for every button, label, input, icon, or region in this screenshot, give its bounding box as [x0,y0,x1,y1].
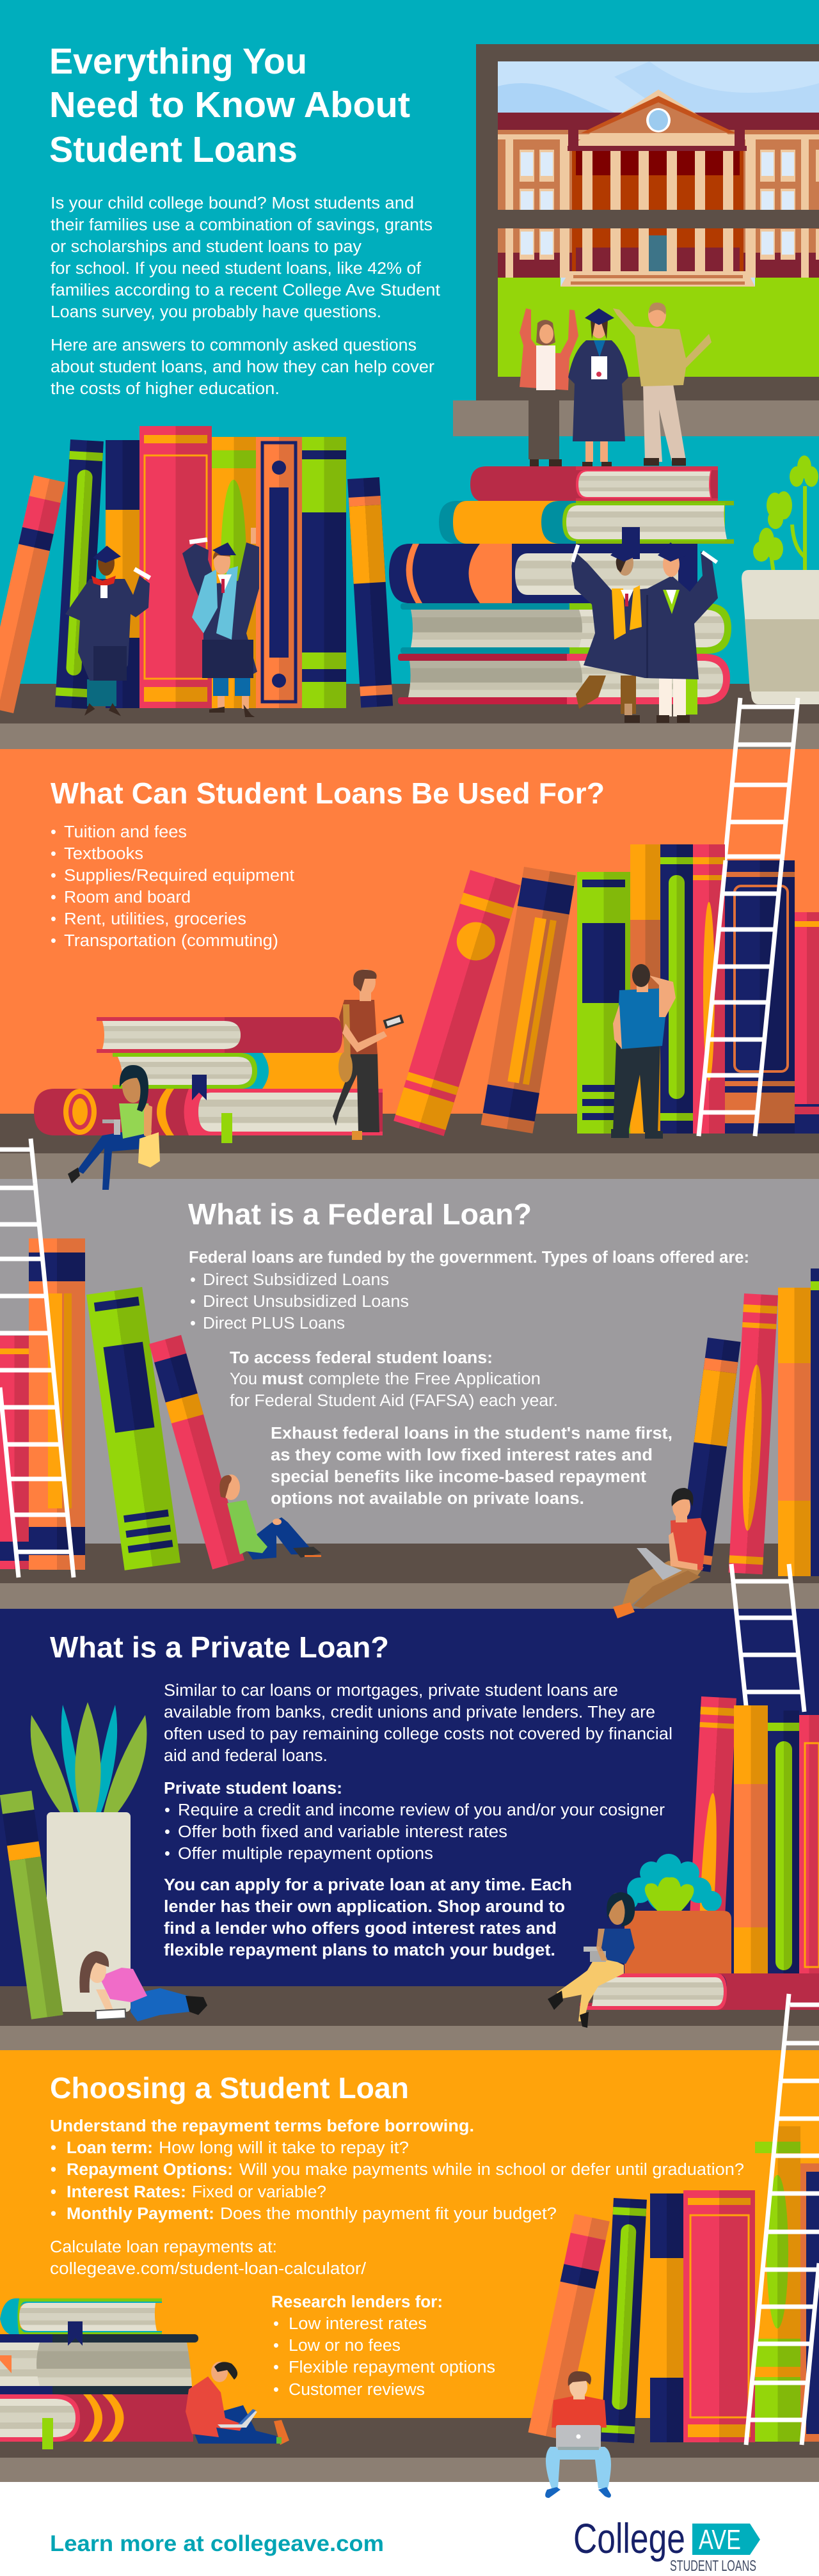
apply note: flexible repayment plans to match your budget. [164,1941,555,1959]
leaning orange book [528,2214,610,2440]
leaning pink book with ellipse [729,1293,778,1574]
research lenders [271,2293,495,2399]
figure: man in blue shirt scratching head [611,964,676,1139]
leaning pink book [686,1696,736,1986]
orange pot [624,1911,731,1973]
list of uses: • [51,867,56,885]
loan types: Federal loans are funded by the government. Types of loans offered are: [189,1249,749,1267]
illustration: right books in federal section [678,1268,819,1576]
loan types: Direct Unsubsidized Loans [203,1293,409,1311]
exhaust federal loans note: as they come with low fixed interest rates and [271,1446,653,1464]
research lenders: • [273,2381,279,2399]
illustration: leaning green book [0,1790,63,2019]
calculator link: Calculate loan repayments at: [50,2238,277,2256]
leaning navy book [678,1338,741,1572]
figure: family with graduate on book stack [520,303,712,468]
leaning navy book right [347,477,393,707]
description: aid and federal loans. [164,1747,328,1765]
intro paragraph 1: families according to a recent College Ave Student [51,281,440,299]
intro paragraph 1: their families use a combination of savings, grants [51,216,433,234]
calculator link [50,2238,367,2278]
illustration: ladder left overlay [0,1183,74,1577]
repayment terms: • [51,2139,56,2157]
private loan features: Offer both fixed and variable interest rates [178,1823,507,1841]
illustration: ladder between federal and private sections [731,1564,804,1712]
description: Similar to car loans or mortgages, private student loans are [164,1682,618,1700]
portico [572,150,743,278]
repayment terms: Repayment Options: [67,2161,233,2179]
figure: two graduates hugging [571,542,718,723]
list of uses: • [51,823,56,841]
amber book [439,501,734,544]
FAFSA note [230,1349,558,1410]
intro paragraph 1: or scholarships and student loans to pay [51,238,362,256]
illustration: right books in choosing section [528,2126,819,2443]
description: available from banks, credit unions and private lenders. They are [164,1703,655,1721]
private loan features: • [164,1801,170,1819]
navy framed book [725,860,795,1134]
repayment terms: • [51,2205,56,2223]
leaning pink book [394,870,520,1136]
pink book [683,2190,755,2442]
list of uses: • [51,845,56,863]
bush [623,1854,722,1913]
section: private background [0,1609,819,2050]
list of uses: Rent, utilities, groceries [64,910,246,928]
exhaust federal loans note [271,1425,672,1508]
calculator link: collegeave.com/student-loan-calculator/ [50,2260,367,2278]
mother [520,308,578,467]
logo: College Ave Student Loans: College [573,2515,685,2562]
intro paragraph 2: the costs of higher education. [51,380,280,398]
repayment terms: Does the monthly payment fit your budget? [220,2205,557,2223]
apply note: lender has their own application. Shop around to [164,1898,565,1916]
apply note [164,1876,572,1959]
figure: man with laptop in red shirt [613,1488,706,1618]
logo: College Ave Student Loans: STUDENT LOANS [670,2557,756,2575]
list of uses: Tuition and fees [64,823,187,841]
list of uses: Textbooks [64,845,143,863]
list of uses: Room and board [64,889,191,906]
figure: woman reading on tablet lying down [79,1951,207,2021]
tall pink book [139,426,212,708]
heading: Choosing a Student Loan [50,2071,409,2105]
father [613,303,712,466]
illustration: upright book row [0,426,393,713]
illustration: ladder between private and choosing sections [781,1994,819,2081]
title: Student Loans [49,129,298,170]
illustration: left book stack in choosing section [0,2298,198,2449]
apply note: find a lender who offers good interest rates and [164,1920,557,1938]
figure: graduate with red scarf [65,546,151,714]
repayment terms: Loan term: [67,2139,153,2157]
private loan features: • [164,1823,170,1841]
loan types [189,1249,749,1332]
leaning orange book [0,475,65,713]
FAFSA note: must [262,1370,304,1388]
green book with navy bands [302,437,346,708]
navy book with green pill [55,439,104,709]
illustration: horizontal book stack [389,466,734,715]
text block: uses [51,777,605,950]
figure: man with tablet [333,969,404,1140]
FAFSA note: complete the Free Application [308,1370,541,1388]
loan types: Direct Subsidized Loans [203,1271,389,1289]
intro paragraph 1: Is your child college bound? Most students and [51,194,414,212]
FAFSA note: To access federal student loans: [230,1349,493,1367]
heading: What is a Federal Loan? [188,1197,532,1231]
bookmark [622,527,640,559]
private loan features: Offer multiple repayment options [178,1845,433,1863]
title: Everything You [49,41,307,82]
research lenders: • [273,2315,279,2333]
exhaust federal loans note: Exhaust federal loans in the student's name first, [271,1425,672,1442]
intro paragraph 2: Here are answers to commonly asked questions [51,336,417,354]
text block: private [50,1631,672,1959]
loan types: Direct PLUS Loans [203,1315,345,1332]
graduate [568,308,628,468]
title: Need to Know About [49,84,410,125]
figure: boy with laptop sitting by books [186,2362,289,2445]
figure: man with laptop front view [545,2371,611,2498]
figure: woman seated with laptop [68,1065,160,1190]
lying book [580,1973,819,2010]
orange book with navy frame [256,437,302,708]
loan types: • [190,1271,196,1289]
illustration: ladder between hero and uses sections [699,698,798,1136]
text block: hero [49,41,440,398]
research lenders: • [273,2337,279,2355]
illustration: ladder top above federal section [0,1139,35,1183]
research lenders: Research lenders for: [271,2293,443,2311]
illustration: potted plant [742,455,819,704]
section: federal background [0,1179,819,1609]
section: hero background [0,0,819,749]
repayment terms: Will you make payments while in school or defer until graduation? [239,2161,744,2179]
illustration: campus building seen through window [453,44,819,436]
footer call to action: Learn more at collegeave.com [50,2531,384,2556]
illustration: private plant with tall pot [31,1702,147,2012]
navy book [389,544,697,603]
research lenders: Flexible repayment options [289,2359,495,2376]
private loan features: • [164,1845,170,1863]
FAFSA note: You [230,1370,257,1388]
illustration: right books and bush in private section [580,1696,819,2010]
illustration: ladder over navy book (redraw on top) [699,857,783,1136]
intro paragraph 1 [51,194,440,321]
title [49,41,410,170]
intro paragraph 1: for school. If you need student loans, like 42% of [51,260,422,278]
leaning navy book [601,2198,647,2443]
green book [577,872,630,1134]
navy book with green pill [660,844,693,1134]
heading: What is a Private Loan? [50,1631,389,1664]
pink book [693,844,725,1134]
illustration: book stack in uses section [34,1017,383,1143]
loan types: • [190,1293,196,1311]
loan types: • [190,1315,196,1332]
figure: boy in green hoodie sitting [219,1474,321,1560]
green book with navy band [755,2126,800,2442]
repayment terms: Interest Rates: [67,2183,186,2201]
intro paragraph 1: Loans survey, you probably have questions. [51,303,381,321]
leaning orange book [481,867,576,1134]
illustration: ladder rungs in choosing section [746,2081,819,2445]
list of uses: • [51,889,56,906]
heading: What Can Student Loans Be Used For? [51,777,605,810]
figure: graduate with blue scarf [182,528,259,716]
figure: woman on book with laptop [548,1892,635,2028]
private loan features [164,1780,665,1863]
exhaust federal loans note: options not available on private loans. [271,1490,584,1508]
repayment terms: Understand the repayment terms before borrowing. [50,2117,474,2135]
research lenders: • [273,2359,279,2376]
leaning pink book [149,1335,244,1569]
FAFSA note: for Federal Student Aid (FAFSA) each year. [230,1392,558,1410]
research lenders: Low interest rates [289,2315,427,2333]
amber book [212,437,256,708]
repayment terms: Fixed or variable? [192,2183,326,2201]
bottom book [0,2394,193,2449]
apply note: You can apply for a private loan at any time. Each [164,1876,572,1894]
middle book [0,2321,198,2394]
leaning green book [86,1287,180,1570]
research lenders: Customer reviews [289,2381,425,2399]
repayment terms: • [51,2161,56,2179]
illustration: left books in federal section [0,1238,244,1570]
window pairs [520,150,819,260]
red book [470,466,718,502]
text block: federal [188,1197,749,1508]
list of uses: • [51,932,56,950]
repayment terms: • [51,2183,56,2201]
orange book with navy bands [29,1238,85,1570]
intro paragraph 2: about student loans, and how they can help cover [51,358,435,376]
research lenders: Low or no fees [289,2337,401,2355]
amber book [113,1053,347,1089]
list of uses: Supplies/Required equipment [64,867,294,885]
intro paragraph 2 [51,336,435,398]
exhaust federal loans note: special benefits like income-based repayment [271,1468,647,1486]
roll book with pages [34,1075,383,1143]
description: often used to pay remaining college costs not covered by financial [164,1725,672,1743]
logo: College Ave Student Loans [573,2515,760,2575]
private loan features: Private student loans: [164,1780,342,1798]
list of uses: Transportation (commuting) [64,932,278,950]
section: uses background [0,749,819,1179]
logo: College Ave Student Loans: AVE [699,2524,741,2556]
repayment terms: How long will it take to repay it? [159,2139,409,2157]
repayment terms [50,2117,744,2223]
text block: choosing [50,2071,744,2399]
list of uses: • [51,910,56,928]
lower book with green spine [401,603,731,654]
lowest book with pink spine [398,654,730,715]
list of uses [51,823,294,950]
repayment terms: Monthly Payment: [67,2205,214,2223]
private loan features: Require a credit and income review of you and/or your cosigner [178,1801,665,1819]
top book [0,2298,162,2335]
red book [97,1017,342,1053]
description [164,1682,672,1765]
section: choosing background [0,2050,819,2482]
illustration: leaning and upright books in uses section [394,844,819,1136]
